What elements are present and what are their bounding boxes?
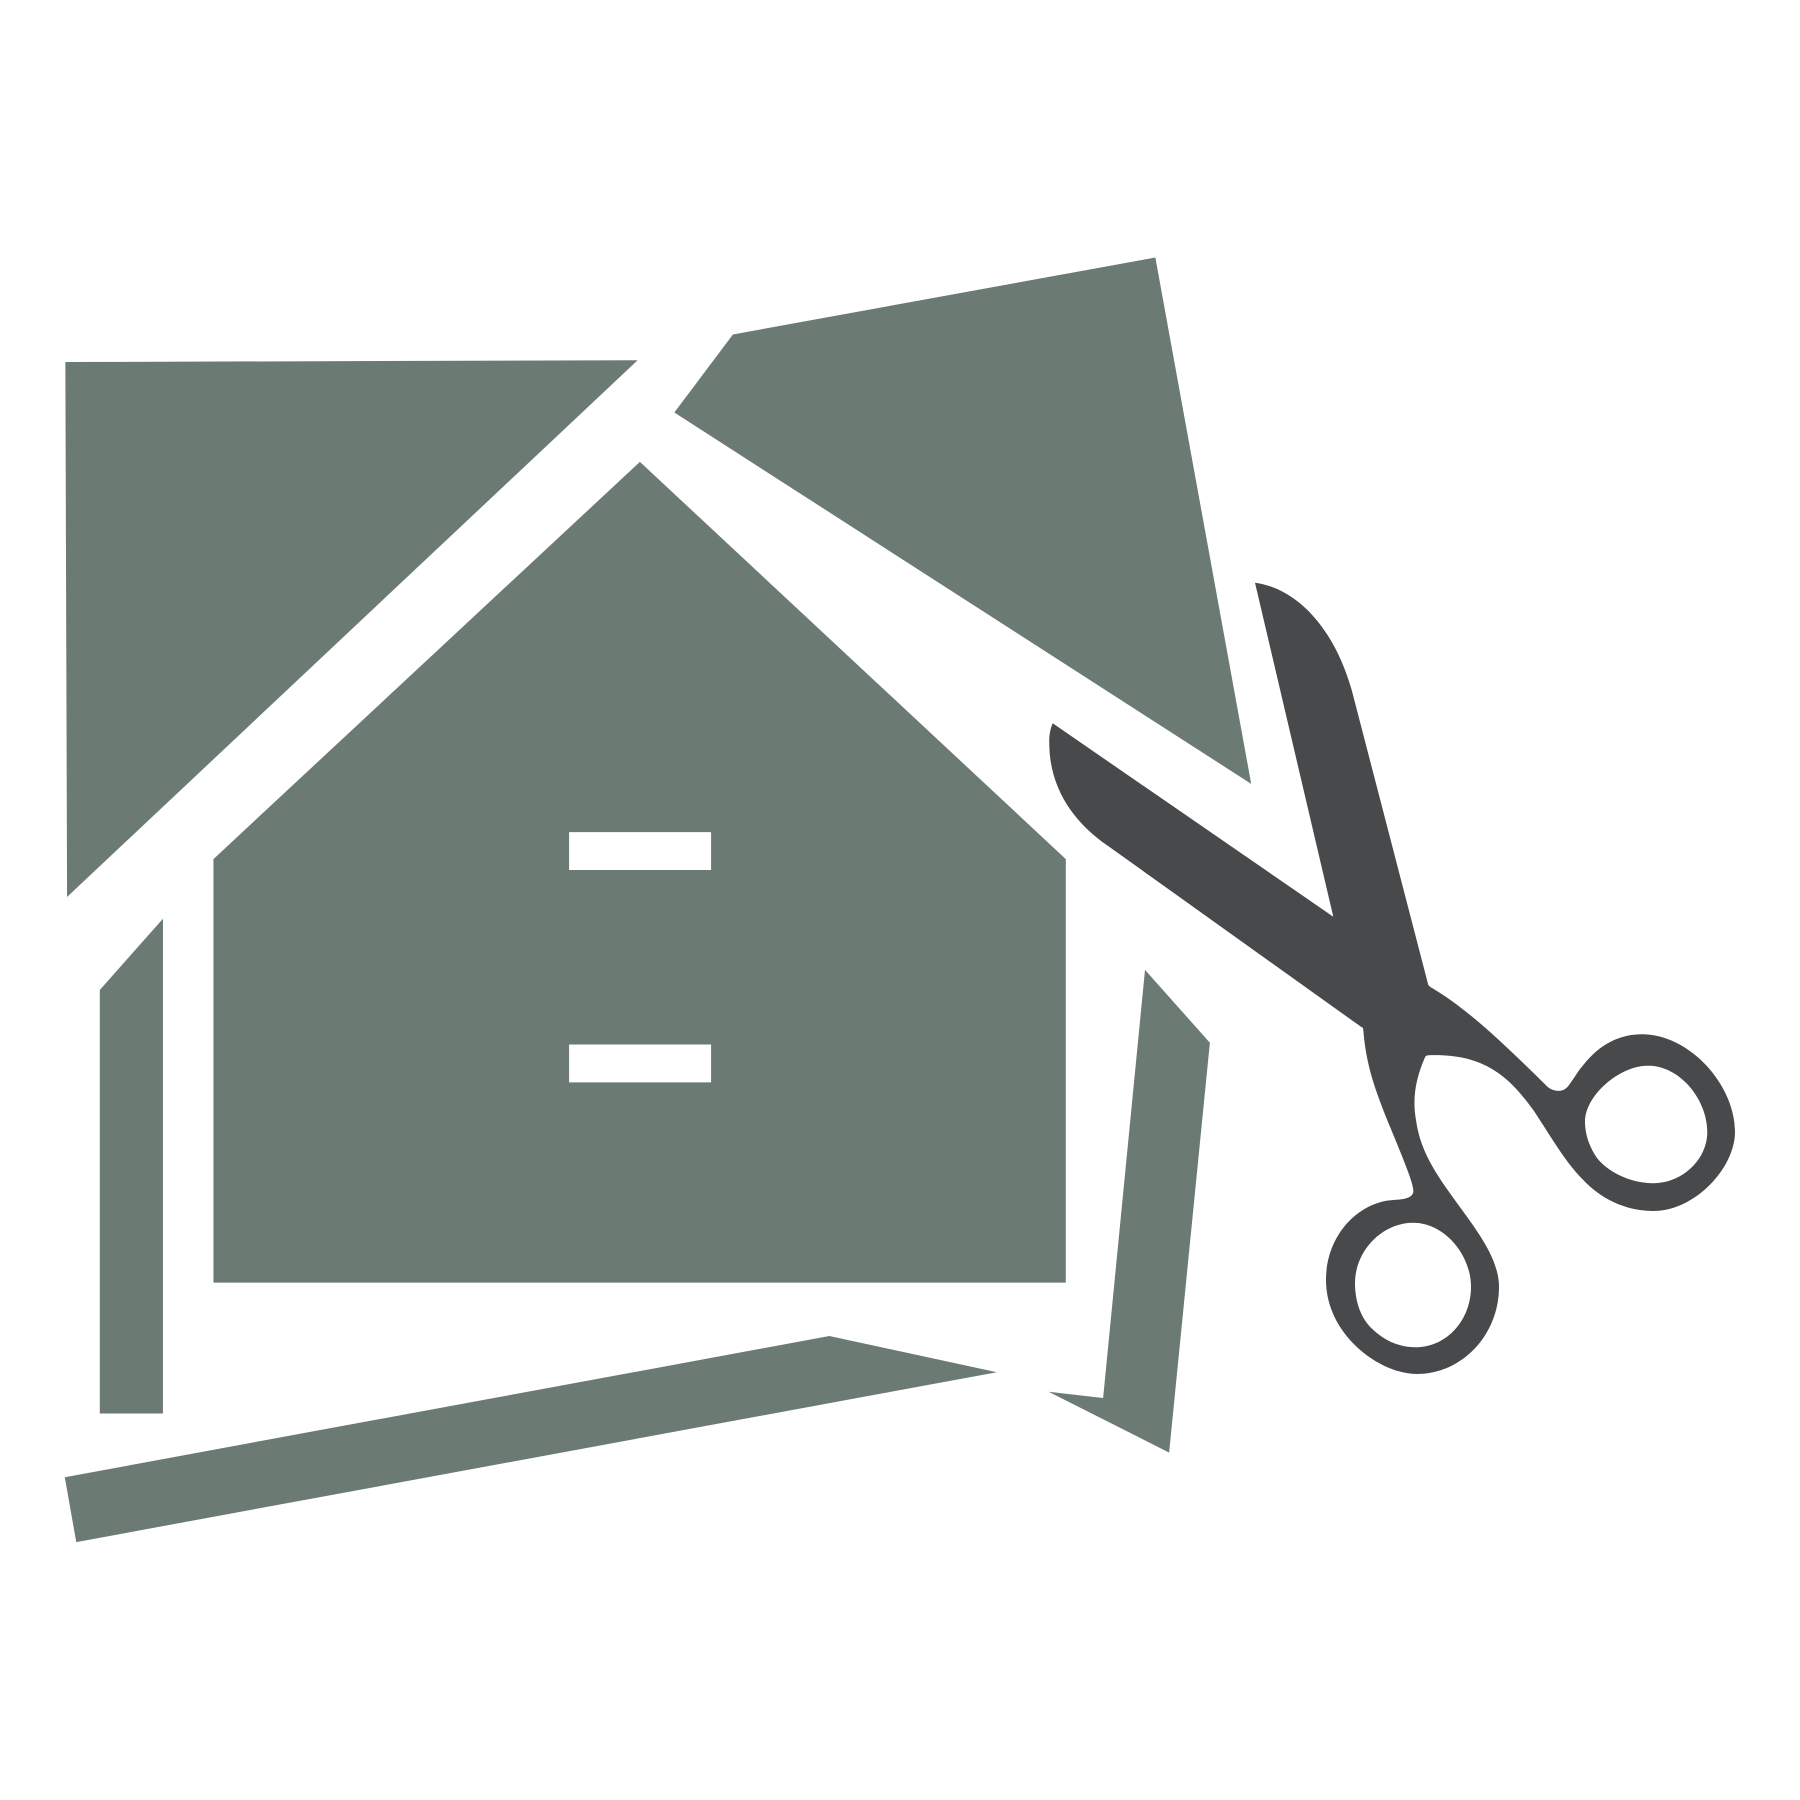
piece: right wall strip xyxy=(1049,970,1210,1453)
house cutout pieces xyxy=(65,258,1251,1542)
icon: scissors xyxy=(1049,583,1735,1374)
piece: bottom ground strip xyxy=(65,1336,997,1542)
piece: left wall strip xyxy=(100,919,163,1414)
piece: top-right roof quadrilateral xyxy=(674,258,1251,784)
house body with two window slots xyxy=(213,462,1066,1283)
piece: top-left roof triangle xyxy=(65,360,638,897)
